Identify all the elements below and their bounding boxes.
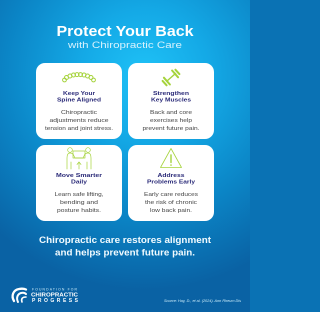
icon: spine [63, 73, 95, 82]
logo wordmark: FOUNDATION FOR [32, 288, 78, 292]
icon: two people lifting [67, 148, 91, 169]
source citation: Source: Hay, D., et al. (2024). Ann Rheum Dis [164, 299, 241, 303]
card heading: Daily [71, 180, 88, 186]
card heading: Keep Your [63, 91, 96, 97]
card body: low back pain. [150, 208, 192, 214]
card heading: Key Muscles [151, 98, 191, 104]
card heading: Address [158, 173, 184, 179]
logo: Foundation for Chiropractic Progress [13, 288, 79, 304]
logo wordmark: CHIROPRACTIC [31, 292, 78, 298]
card body: Chiropractic [61, 110, 97, 116]
card heading: Problems Early [147, 180, 196, 186]
logo wordmark [31, 288, 79, 304]
panel: keep your spine aligned [36, 63, 122, 139]
panel: address problems early [128, 145, 214, 221]
card body: bending and [60, 200, 98, 206]
card body: adjustments reduce [50, 118, 108, 124]
card heading: Strengthen [153, 91, 190, 97]
icon: logo swoosh [13, 289, 26, 302]
icon: warning triangle [160, 148, 182, 168]
subtitle: with Chiropractic Care [67, 40, 182, 51]
card body: exercises help [150, 118, 192, 124]
card heading: Spine Aligned [57, 98, 102, 104]
card body: Back and core [150, 110, 192, 116]
card body: tension and joint stress. [45, 126, 113, 132]
card body: Early care reduces [144, 192, 198, 198]
logo wordmark: PROGRESS [32, 298, 79, 304]
card body: prevent future pain. [142, 126, 200, 132]
card body: Learn safe lifting, [54, 192, 104, 198]
panel: move smarter daily [36, 145, 122, 221]
icon: dumbbell [163, 70, 179, 85]
card heading: Move Smarter [56, 173, 103, 179]
card body: the risk of chronic [145, 200, 197, 206]
panel: strengthen key muscles [128, 63, 214, 139]
takeaway statement: Chiropractic care restores alignment [39, 235, 211, 245]
card body: posture habits. [57, 208, 101, 214]
title: Protect Your Back [56, 23, 194, 40]
takeaway statement: and helps prevent future pain. [55, 248, 195, 258]
